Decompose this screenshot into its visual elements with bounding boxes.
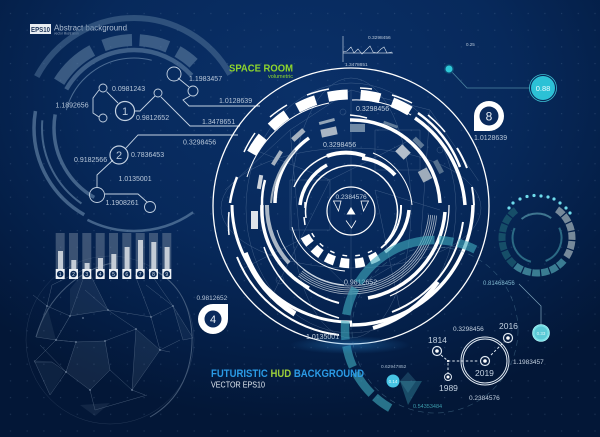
glow under main HUD [290,336,410,354]
node diagram labels [56,76,252,207]
node diagram labels: 1.3478651 [202,119,235,126]
teal triangle and labels [381,364,442,410]
badge 8: 1.0128639 [474,135,507,142]
node diagram labels: 0.0981243 [112,86,145,93]
bar chart: nine vertical gauges: 3 [85,272,88,278]
teal dashed arc [345,240,525,420]
node diagram labels: 2 [116,150,122,162]
left background ring gauge [24,18,244,238]
timeline diagram: 2019 [475,368,494,378]
timeline diagram: 1.1983457 [513,359,544,366]
grey blocks [251,118,444,229]
headline: futuristic HUD background: VECTOR EPS10 [211,380,265,390]
small label 0.25: 0.25 [466,42,475,47]
segmented ring of white blocks [238,94,464,322]
badge 4 [196,295,228,334]
bar chart: nine vertical gauges: 9 [165,272,168,278]
main HUD labels: 0.3298456 [356,106,389,113]
node diagram lines and circles [90,67,260,212]
headline: futuristic HUD background: FUTURISTIC HUD BACKGROUND [211,368,364,380]
main HUD labels: 0.3298456 [323,142,356,149]
main circular HUD [213,68,489,344]
right ring gauge [488,189,586,287]
teal callout: 0.81468456 [483,281,515,287]
headline: futuristic HUD background [211,368,364,390]
teal triangle and labels: 0.54353484 [413,404,442,410]
timeline diagram: 1989 [439,383,458,393]
hatched grey band [265,122,437,294]
timeline diagram: 1814 [428,335,447,345]
cyan callout 0.88 [444,64,556,102]
node diagram labels: 1.0128639 [219,98,252,105]
left-hand thick arcs [227,212,230,235]
thin arcs around block ring [244,88,412,177]
main HUD labels: 1.0135001 [306,334,339,341]
bar chart: nine vertical gauges: 1 [59,272,62,278]
timeline diagram: 2016 [499,321,518,331]
center circle [327,187,375,235]
globe wireframe [26,256,194,424]
badge 4: 0.9812652 [196,295,228,302]
cyan dots on right gauge [507,194,572,215]
cyan callout 0.88: 0.88 [536,84,550,93]
node diagram labels: 0.9812652 [136,115,169,122]
title: space room: SPACE ROOM [229,62,293,74]
main HUD labels: 0.2384576 [336,194,367,201]
title: space room: volumetric [268,74,293,80]
bar chart: nine vertical gauges: 6 [125,272,128,278]
header label: EPS10 abstract background [30,22,127,36]
line chart top [343,35,393,68]
node diagram labels: 0.3298456 [183,140,216,146]
badge 8: 8 [486,110,493,124]
line chart top: 0.3298456 [368,35,391,41]
bar chart: nine vertical gauges: 7 [139,272,142,278]
header label: EPS10 abstract background: Abstract background [54,22,127,32]
globe node dots [46,305,174,391]
top arcs [350,120,440,203]
bar chart: nine vertical gauges: 5 [112,272,115,278]
header label: EPS10 abstract background: EPS10 [31,25,50,34]
right-hand thick arcs [415,118,465,205]
node diagram labels: 1.1908261 [106,200,139,207]
outer thin ring [213,68,489,344]
bar chart: nine vertical gauges: 2 [72,272,75,278]
node diagram labels: 1 [122,106,128,118]
node diagram labels: 1.1983457 [189,76,222,83]
bar chart: nine vertical gauges [56,233,171,279]
line chart top: 1.3478651 [345,62,368,68]
node diagram labels: 0.9182566 [74,157,107,164]
inner rings [294,152,352,187]
timeline diagram: 0.2384576 [469,395,500,402]
teal callout [483,281,550,342]
timeline diagram [428,321,544,402]
teal callout: 0.33 [537,331,546,336]
node diagram labels: 1.1892656 [56,102,89,110]
main HUD labels: 0.9812652 [344,280,377,286]
bar chart: nine vertical gauges: 8 [152,272,155,278]
sphere wireframe inside main HUD [221,78,481,338]
title: space room [229,62,293,80]
teal triangle and labels: 0.62947852 [381,364,407,370]
badge 8 [474,101,507,142]
node diagram labels: 1.0135001 [118,176,152,183]
header label: EPS10 abstract background: vector illustration [54,32,79,36]
main HUD labels [306,106,389,341]
teal triangle and labels: 0.14 [389,379,398,384]
bar chart: nine vertical gauges: 4 [99,272,102,278]
inner white block ring [298,158,404,264]
timeline diagram: 0.3298456 [453,326,484,333]
badge 4: 4 [210,314,216,326]
node diagram labels: 0.7836453 [131,152,164,159]
